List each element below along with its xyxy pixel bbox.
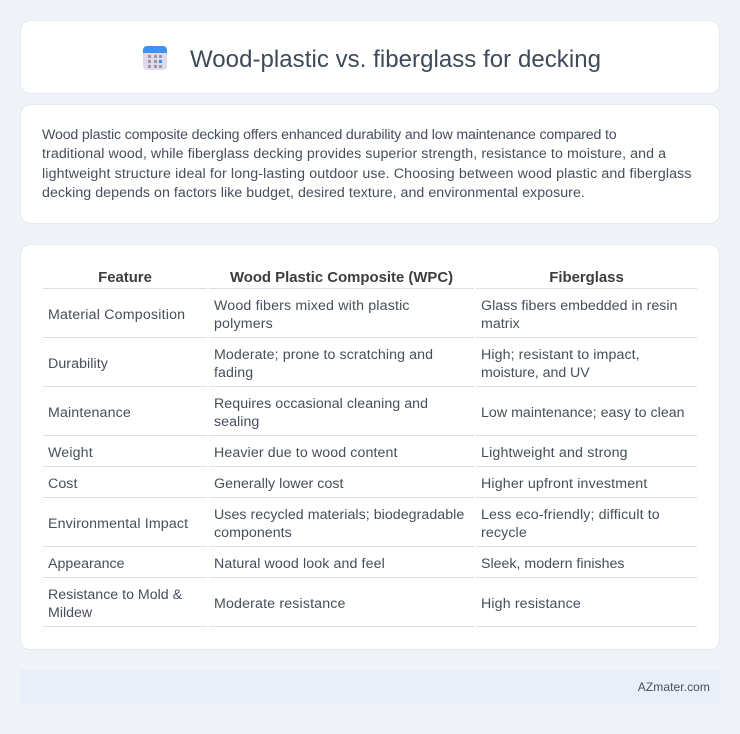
row: Appearance: Appearance	[48, 556, 125, 572]
row: Durability: fading	[214, 365, 253, 381]
row: Material Composition: Material Composition	[48, 307, 185, 323]
row: Environmental Impact: Less eco-friendly; difficult to	[481, 507, 660, 523]
icon: calendar	[143, 46, 167, 70]
row: Resistance to Mold & Mildew: Moderate resistance	[214, 596, 346, 612]
title: Wood-plastic vs. fiberglass for decking	[190, 46, 601, 73]
row: Maintenance	[48, 396, 685, 430]
table header: Wood Plastic Composite: Wood Plastic Composite (WPC)	[230, 270, 453, 286]
row: Durability: Durability	[48, 356, 108, 372]
row: Cost: Generally lower cost	[214, 476, 344, 492]
intro text: Wood plastic composite decking offers enhanced durability and low maintenance compared to	[42, 127, 617, 143]
row: Material Composition	[48, 298, 677, 332]
row: Cost	[48, 476, 648, 492]
row: Appearance: Natural wood look and feel	[214, 556, 385, 572]
row: Environmental Impact: Environmental Impact	[48, 516, 188, 532]
row: Cost: Cost	[48, 476, 78, 492]
intro text: decking depends on factors like budget, desired texture, and environmental exposure.	[42, 185, 585, 201]
row: Resistance to Mold & Mildew: Mildew	[48, 605, 92, 621]
row: Maintenance: Requires occasional cleaning and	[214, 396, 428, 412]
row: Durability	[48, 347, 640, 381]
row: Durability: Moderate; prone to scratching and	[214, 347, 433, 363]
row: Maintenance: Maintenance	[48, 405, 131, 421]
row: Appearance: Sleek, modern finishes	[481, 556, 625, 572]
row: Material Composition: matrix	[481, 316, 520, 332]
row: Weight: Lightweight and strong	[481, 445, 628, 461]
row: Durability: moisture, and UV	[481, 365, 590, 381]
row: Resistance to Mold & Mildew	[48, 587, 581, 621]
footer credit: AZmater.com	[638, 680, 710, 694]
footer	[20, 670, 720, 704]
panel: comparison table	[20, 244, 720, 650]
row: Environmental Impact: components	[214, 525, 292, 541]
panel: introduction	[20, 104, 720, 224]
row: Environmental Impact	[48, 507, 660, 541]
title card	[20, 20, 720, 94]
intro text: lightweight structure ideal for long-lasting outdoor use. Choosing between wood plastic and fiberglass	[42, 166, 692, 182]
row: Weight	[48, 445, 628, 461]
row: Maintenance: sealing	[214, 414, 259, 430]
row: Weight: Heavier due to wood content	[214, 445, 398, 461]
row: Maintenance: Low maintenance; easy to clean	[481, 405, 685, 421]
row: Durability: High; resistant to impact,	[481, 347, 640, 363]
row: Material Composition: polymers	[214, 316, 273, 332]
table header: Fiberglass: Fiberglass	[549, 270, 624, 286]
row: Resistance to Mold & Mildew: High resistance	[481, 596, 581, 612]
row: Appearance	[48, 556, 625, 572]
row: Material Composition: Glass fibers embedded in resin	[481, 298, 677, 314]
table header: Feature: Feature	[98, 270, 152, 286]
intro text	[42, 127, 692, 201]
row: Resistance to Mold & Mildew: Resistance to Mold &	[48, 587, 182, 603]
row: Environmental Impact: Uses recycled materials; biodegradable	[214, 507, 464, 523]
intro text: traditional wood, while fiberglass decking provides superior strength, resistance to moisture, and a	[42, 146, 666, 162]
row: Weight: Weight	[48, 445, 93, 461]
row: Environmental Impact: recycle	[481, 525, 527, 541]
row: Cost: Higher upfront investment	[481, 476, 647, 492]
row: Material Composition: Wood fibers mixed with plastic	[214, 298, 410, 314]
